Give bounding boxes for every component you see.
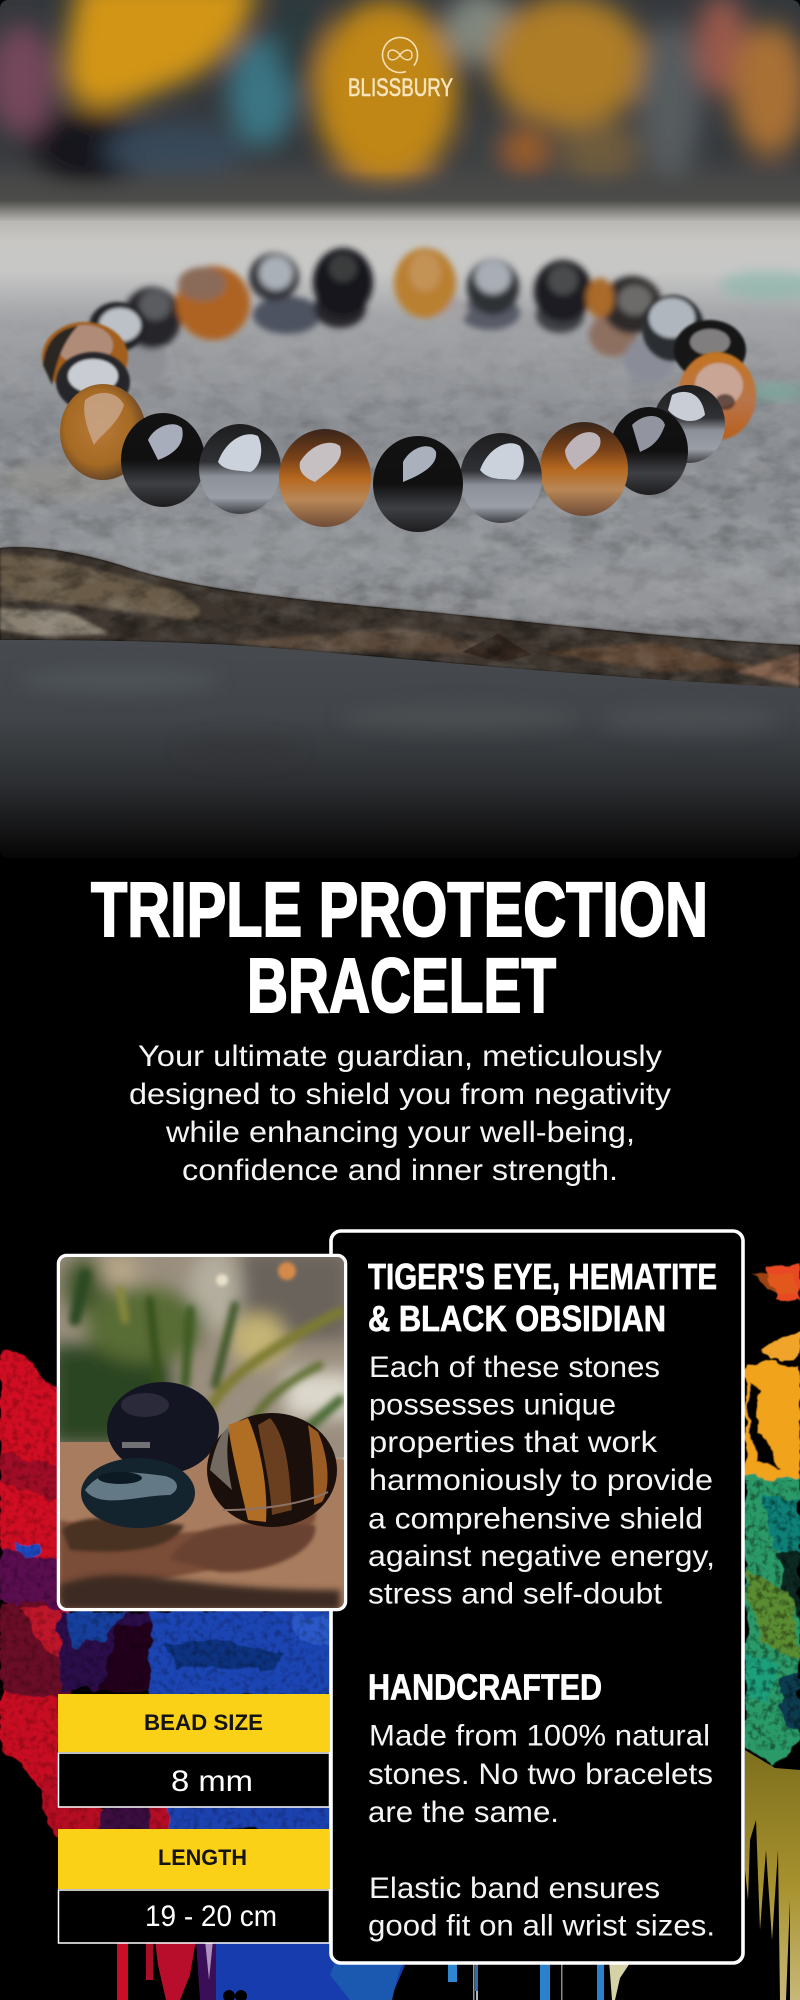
hematite 1 xyxy=(199,424,281,514)
tiger's eye right xyxy=(540,422,628,516)
panel: stone photo xyxy=(50,1250,355,1610)
text: handcrafted description: are the same. xyxy=(368,1796,559,1829)
stone: blue obsidian xyxy=(81,1458,195,1528)
text: stones description: stress and self-doubt xyxy=(368,1578,663,1610)
stone: tiger's eye xyxy=(207,1413,337,1527)
rock ledge xyxy=(60,1442,344,1610)
spec table: length: 19 - 20 cm xyxy=(145,1900,277,1933)
paint splash: left and bottom xyxy=(0,1349,632,2000)
heading: stones: TIGER'S EYE, HEMATITE xyxy=(368,1256,717,1297)
tiger's eye golden left xyxy=(60,384,146,480)
heading: stones xyxy=(368,1256,717,1339)
text: stones description: harmoniously to provide xyxy=(369,1464,713,1497)
text: handcrafted description xyxy=(368,1720,715,1942)
text: handcrafted description: good fit on all wrist sizes. xyxy=(368,1910,715,1942)
text: stones description: a comprehensive shield xyxy=(368,1502,703,1536)
tiger's eye centre xyxy=(279,429,371,527)
text: stones description: against negative energy, xyxy=(368,1540,715,1573)
text: stones description: possesses unique xyxy=(369,1388,616,1422)
hero photo: bracelet on stone xyxy=(0,0,800,860)
blurred plants background xyxy=(60,1257,344,1457)
spec table: bead size xyxy=(58,1694,330,1807)
hematite 2 xyxy=(460,433,542,523)
obsidian centre xyxy=(373,436,463,532)
paint splash: right xyxy=(745,1264,800,2000)
text: handcrafted description: stones. No two bracelets xyxy=(368,1758,713,1791)
spec table: bead size: 8 mm xyxy=(171,1765,253,1798)
bracelet beads xyxy=(42,248,756,532)
spec table: length xyxy=(58,1829,330,1943)
spec table: bead size: BEAD SIZE xyxy=(144,1710,263,1735)
panel: description xyxy=(331,1231,743,1963)
logo: Blissbury: BLISSBURY xyxy=(348,74,453,102)
debris band xyxy=(0,540,800,695)
intro paragraph: Your ultimate guardian, meticulously xyxy=(138,1040,662,1073)
text: stones description: Each of these stones xyxy=(369,1351,660,1384)
rear beads (out of focus) xyxy=(123,248,676,384)
blurred front stone xyxy=(0,640,800,860)
text: handcrafted description: Elastic band ensures xyxy=(369,1872,660,1905)
stone: back obsidian xyxy=(107,1382,219,1474)
text: stones description: properties that work xyxy=(369,1426,658,1459)
intro paragraph: designed to shield you from negativity xyxy=(129,1078,671,1111)
heading: handcrafted: HANDCRAFTED xyxy=(368,1666,602,1708)
intro paragraph: while enhancing your well-being, xyxy=(165,1116,635,1149)
intro paragraph xyxy=(129,1040,671,1187)
heading: stones: & BLACK OBSIDIAN xyxy=(368,1298,666,1339)
text: stones description xyxy=(368,1351,715,1610)
obsidian 1 xyxy=(121,413,205,507)
intro paragraph: confidence and inner strength. xyxy=(182,1154,618,1187)
blurred graffiti wall xyxy=(0,0,800,198)
side bead xyxy=(56,352,756,440)
text: handcrafted description: Made from 100% natural xyxy=(369,1720,710,1752)
obsidian right xyxy=(610,407,688,495)
title xyxy=(91,867,708,1029)
bottom drips xyxy=(117,1940,632,2000)
hematite right xyxy=(653,385,725,463)
spec table: length: LENGTH xyxy=(158,1845,247,1870)
stone shadows xyxy=(62,1518,184,1552)
logo: Blissbury xyxy=(349,36,453,96)
stone surface xyxy=(0,170,800,680)
title: BRACELET xyxy=(247,943,556,1029)
